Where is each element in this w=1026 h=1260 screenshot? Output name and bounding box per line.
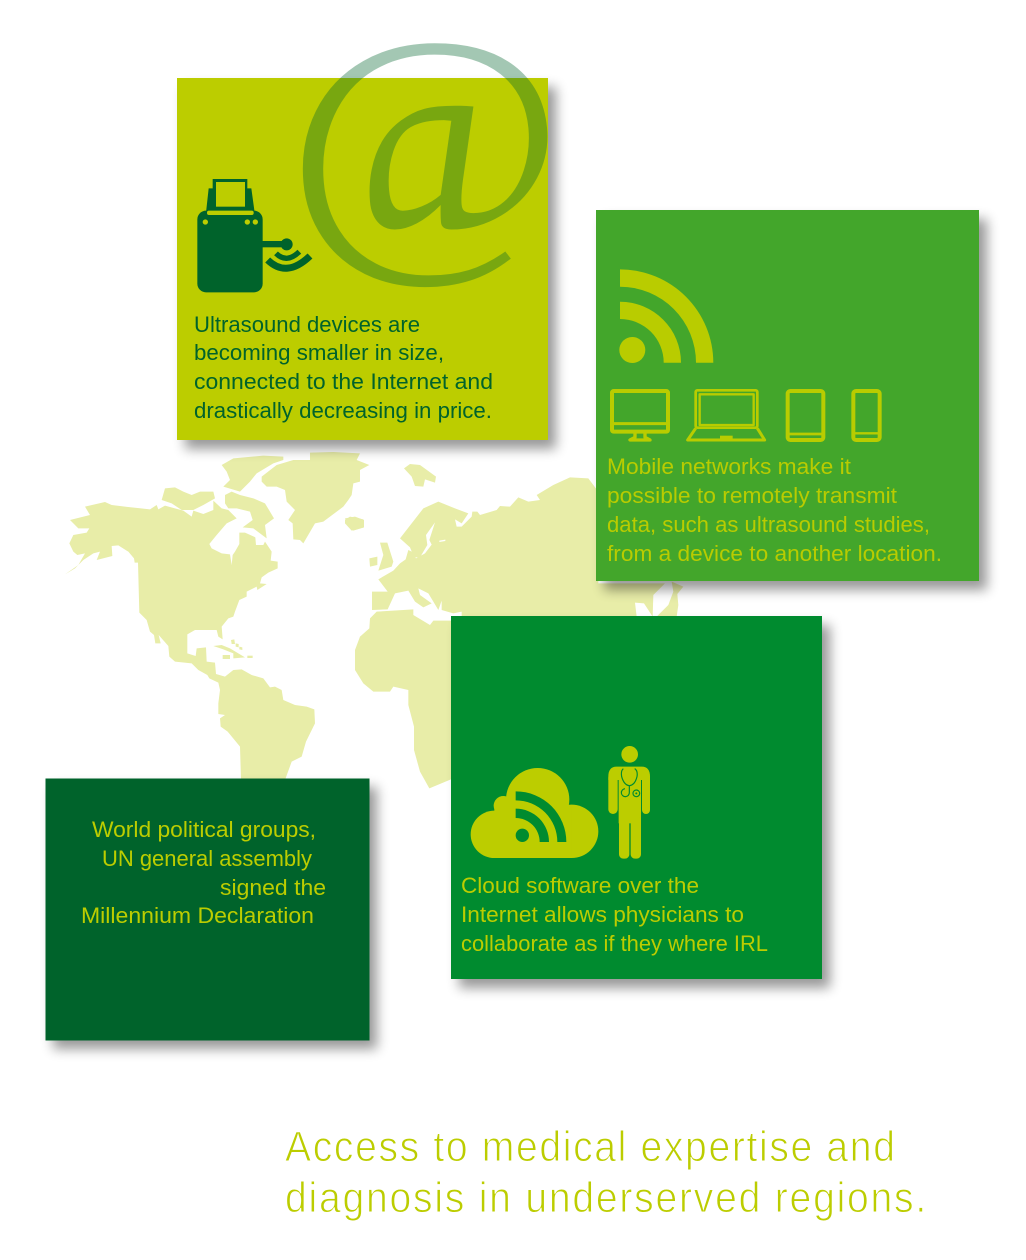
text: mobile networks description: data, such as ultrasound studies, xyxy=(607,512,930,537)
text: ultrasound description: Ultrasound devices are xyxy=(194,312,420,337)
text: ultrasound description: drastically decreasing in price. xyxy=(194,398,492,423)
icon: connected devices xyxy=(611,390,880,440)
icon: cloud with signal xyxy=(471,768,598,858)
text: cloud software description xyxy=(461,873,768,956)
text: mobile networks description: from a device to another location. xyxy=(607,541,942,566)
text: millennium declaration description: World political groups, xyxy=(92,817,316,842)
text: mobile networks description: possible to remotely transmit xyxy=(607,483,897,508)
text: ultrasound description xyxy=(194,312,493,423)
text: mobile networks description xyxy=(607,454,942,566)
title: diagnosis in underserved regions. xyxy=(285,1173,926,1221)
panel: cloud software xyxy=(451,616,830,988)
map: Americas and Arctic xyxy=(65,452,436,780)
icon: wireless signal xyxy=(619,269,713,363)
map: Europe, Asia and Africa xyxy=(345,477,683,788)
title xyxy=(285,1122,926,1221)
text: ultrasound description: connected to the Internet and xyxy=(194,369,493,394)
text: cloud software description: collaborate as if they where IRL xyxy=(461,931,768,956)
text: ultrasound description: becoming smaller in size, xyxy=(194,340,444,365)
text: cloud software description: Internet allows physicians to xyxy=(461,902,744,927)
text: millennium declaration description: Millennium Declaration xyxy=(81,903,314,928)
text: millennium declaration description: signed the xyxy=(220,875,326,900)
text: mobile networks description: Mobile networks make it xyxy=(607,454,851,479)
panel: mobile networks xyxy=(596,210,987,590)
text: millennium declaration description: UN general assembly xyxy=(102,846,312,871)
title: Access to medical expertise and xyxy=(285,1122,895,1170)
text: millennium declaration description xyxy=(81,817,326,928)
text: cloud software description: Cloud software over the xyxy=(461,873,699,898)
icon: portable ultrasound device xyxy=(197,179,310,292)
panel: millennium declaration xyxy=(46,778,377,1049)
icon: doctor with stethoscope xyxy=(608,746,650,859)
panel: ultrasound devices xyxy=(177,0,576,449)
world map xyxy=(65,452,683,788)
